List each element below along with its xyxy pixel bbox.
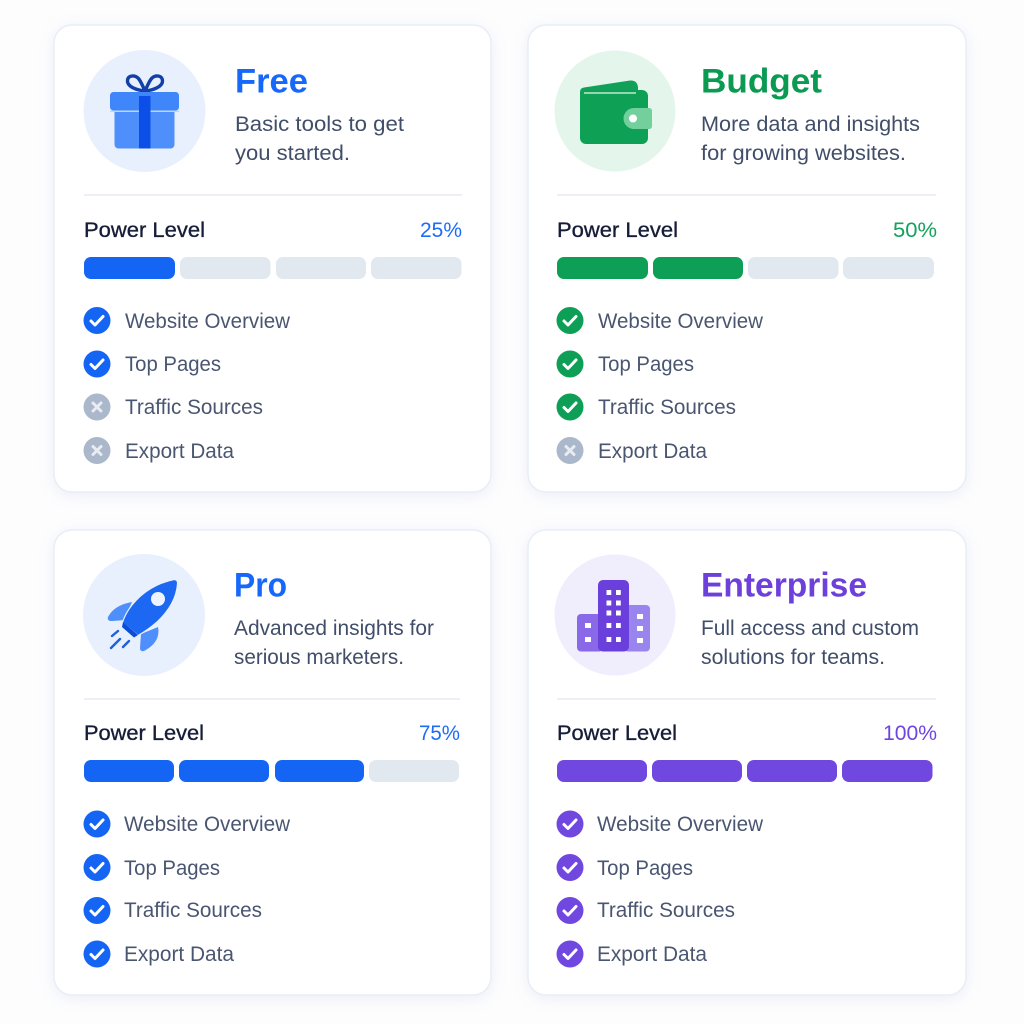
power bar: 2 of 4 segments (557, 257, 934, 279)
power level value: 75% (419, 722, 460, 745)
feature: Top Pages included: Top Pages (598, 353, 694, 376)
power level label: Power Level (84, 219, 205, 242)
feature: Export Data excluded: Export Data (125, 440, 234, 463)
feature: Export Data included (556, 940, 707, 968)
feature: Export Data included: Export Data (597, 943, 707, 966)
feature: Top Pages included: Top Pages (124, 857, 220, 880)
feature: Export Data included (84, 940, 234, 968)
feature: Top Pages included (84, 854, 220, 881)
power level value: 25% (420, 219, 462, 242)
plan name: Pro: Pro (234, 566, 287, 604)
description: Advanced insights for (234, 617, 434, 640)
feature: Export Data excluded (84, 437, 234, 464)
panel: Enterprise plan (528, 530, 966, 995)
plan name: Enterprise: Enterprise (701, 566, 867, 604)
description (234, 617, 434, 669)
feature: Export Data excluded (556, 437, 707, 464)
feature: Traffic Sources included (556, 897, 735, 924)
description: for growing websites. (701, 142, 906, 165)
feature: Top Pages included (84, 350, 221, 378)
feature: Top Pages included (556, 350, 694, 378)
feature: Website Overview included (84, 307, 291, 334)
description: solutions for teams. (701, 646, 885, 669)
description: serious marketers. (234, 646, 404, 669)
description (235, 113, 404, 165)
feature: Top Pages included: Top Pages (125, 353, 221, 376)
feature: Traffic Sources excluded (84, 394, 263, 420)
feature: Export Data included: Export Data (124, 943, 234, 966)
panel: Pro plan (54, 530, 491, 995)
feature: Website Overview included: Website Overview (598, 310, 764, 333)
description: you started. (235, 142, 350, 165)
power level value: 50% (893, 219, 937, 242)
plan name: Budget: Budget (701, 62, 822, 100)
feature: Traffic Sources excluded: Traffic Sources (125, 396, 263, 419)
feature: Export Data excluded: Export Data (598, 440, 707, 463)
icon: wallet (554, 50, 676, 172)
icon: rocket (83, 554, 205, 676)
power level label: Power Level (84, 722, 204, 745)
feature: Traffic Sources included: Traffic Sources (597, 899, 735, 922)
feature: Website Overview included: Website Overview (124, 813, 291, 836)
description (701, 113, 920, 165)
power level label: Power Level (557, 219, 678, 242)
feature: Website Overview included (84, 810, 291, 838)
panel: Budget plan (528, 25, 966, 492)
feature: Traffic Sources included: Traffic Sources (124, 899, 262, 922)
description: Basic tools to get (235, 113, 404, 136)
plan name: Free: Free (235, 62, 308, 100)
icon: gift (84, 50, 206, 172)
feature: Top Pages included: Top Pages (597, 857, 693, 880)
power bar: 4 of 4 segments (557, 760, 932, 782)
description: Full access and custom (701, 617, 919, 640)
icon: buildings (554, 554, 676, 676)
feature: Traffic Sources included: Traffic Sources (598, 396, 736, 419)
feature: Traffic Sources included (84, 897, 262, 924)
power level label: Power Level (557, 722, 677, 745)
feature: Website Overview included (556, 810, 764, 838)
description: More data and insights (701, 113, 920, 136)
power bar: 3 of 4 segments (84, 760, 459, 782)
feature: Website Overview included: Website Overview (125, 310, 291, 333)
panel: Free plan (54, 25, 491, 492)
feature: Top Pages included (556, 854, 693, 881)
feature: Traffic Sources included (556, 394, 736, 420)
feature: Website Overview included: Website Overview (597, 813, 764, 836)
description (701, 617, 919, 669)
feature: Website Overview included (556, 307, 764, 334)
power bar: 1 of 4 segments (84, 257, 462, 279)
power level value: 100% (883, 722, 937, 745)
